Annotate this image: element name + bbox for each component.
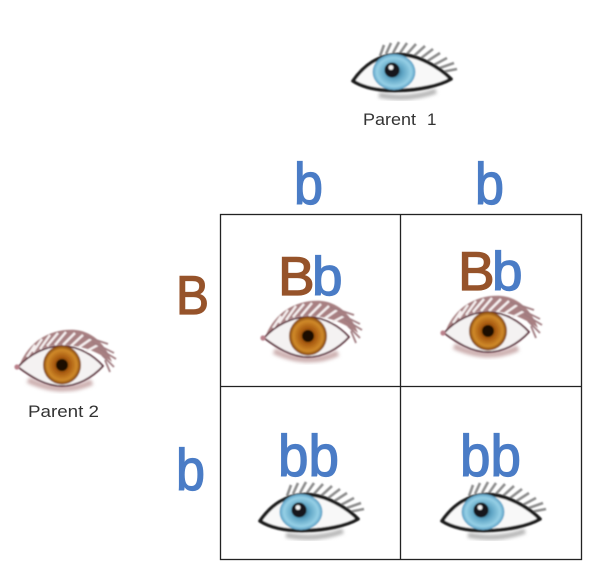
genotype Bb: b bbox=[492, 240, 523, 302]
cell: Bb brown eye, top left bbox=[260, 245, 362, 360]
genotype Bb: B bbox=[278, 245, 315, 307]
genotype bb: bb bbox=[278, 424, 339, 489]
icon: brown eye bbox=[260, 301, 362, 360]
column allele header: b: b bbox=[475, 152, 504, 217]
parent 1: blue eye with label bbox=[353, 42, 457, 129]
genotype bb: bb bbox=[460, 424, 521, 489]
cell: bb blue eye, bottom left bbox=[260, 424, 364, 537]
genotype Bb: B bbox=[458, 240, 495, 302]
cell: bb blue eye, bottom right bbox=[442, 424, 546, 537]
punnett square grid bbox=[220, 214, 582, 560]
icon: blue eye bbox=[260, 482, 364, 537]
row allele header: b: b bbox=[176, 438, 205, 503]
icon: parent 1 blue eye bbox=[353, 42, 457, 97]
icon: parent 2 brown eye bbox=[14, 330, 116, 389]
column allele header: b: b bbox=[294, 152, 323, 217]
icon: blue eye bbox=[442, 482, 546, 537]
cell: Bb brown eye, top right bbox=[440, 240, 542, 355]
parent 2: brown eye with label bbox=[14, 330, 116, 421]
label: Parent 2: Parent 2 bbox=[28, 402, 99, 421]
label: Parent 1: Parent bbox=[363, 110, 416, 129]
label: Parent 1: 1 bbox=[427, 110, 436, 129]
icon: brown eye bbox=[440, 296, 542, 355]
row allele header: B: B bbox=[176, 264, 209, 326]
genotype Bb: b bbox=[312, 245, 343, 307]
